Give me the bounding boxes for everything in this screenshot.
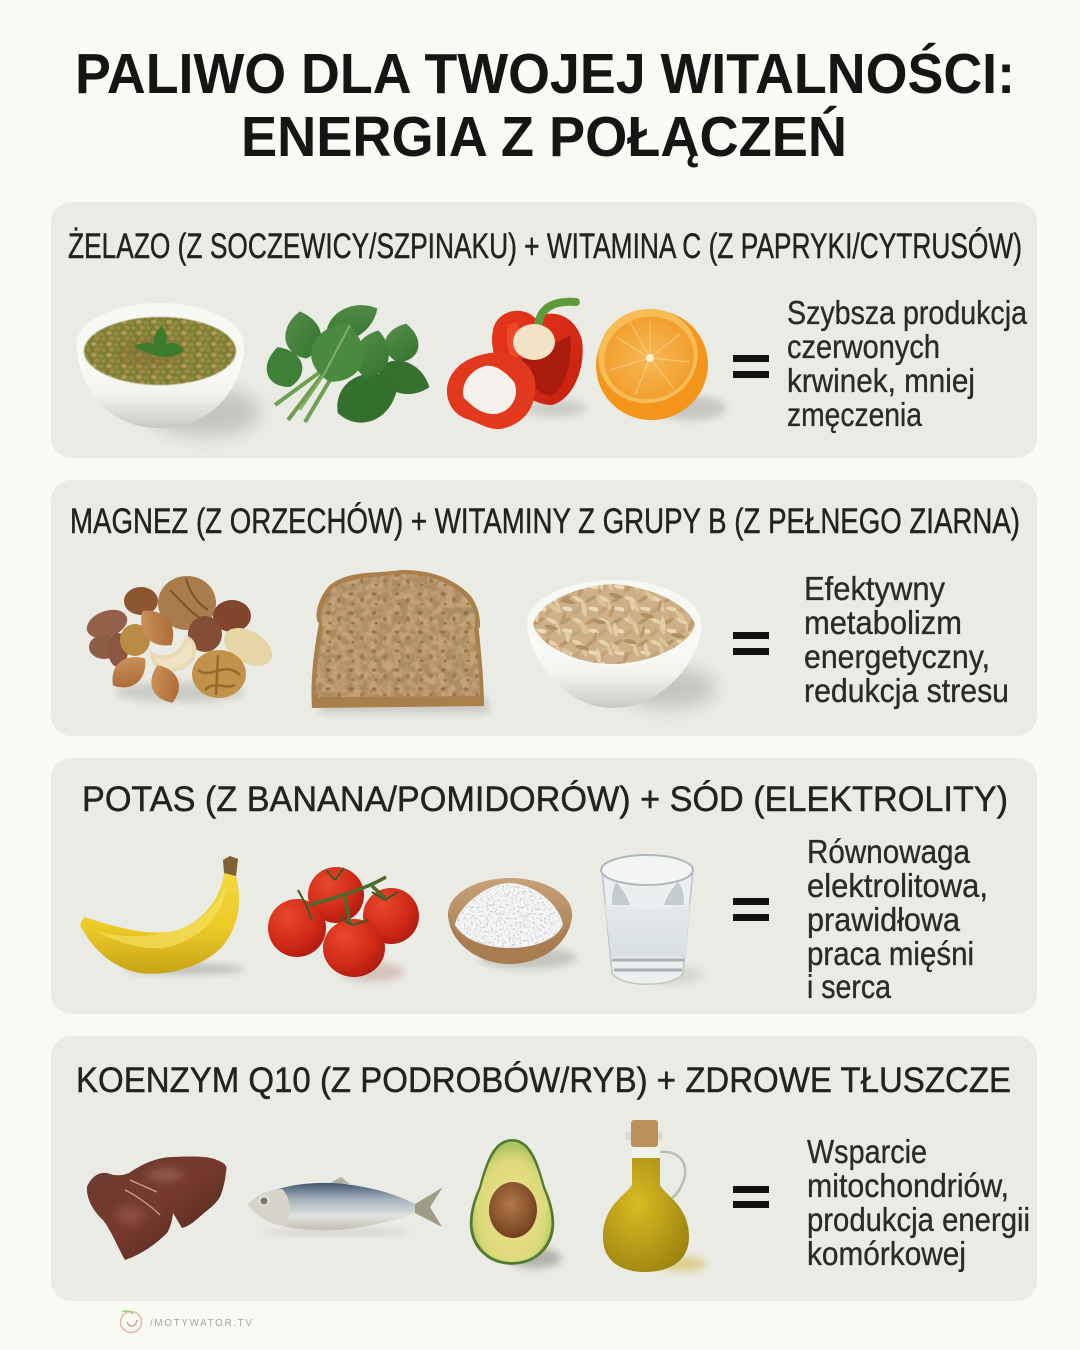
- watermark: [120, 1311, 252, 1332]
- equals sign: [733, 1186, 769, 1208]
- icon: tomatoes on the vine: [268, 867, 419, 982]
- result text: magnesium: [804, 570, 1009, 709]
- result text: coenzyme Q10: komórkowej: [807, 1235, 966, 1272]
- result text: potassium: [807, 833, 988, 1005]
- result text: coenzyme Q10: produkcja energii: [807, 1201, 1030, 1238]
- title: PALIWO DLA TWOJEJ WITALNOŚCI:: [75, 42, 1015, 106]
- icon: whole grain bread: [311, 570, 488, 713]
- icon: brown rice bowl: [527, 580, 716, 708]
- icon: olive oil bottle: [603, 1120, 706, 1272]
- icon: banana: [80, 856, 245, 974]
- result text: potassium: prawidłowa: [807, 901, 961, 938]
- title: [75, 42, 1015, 169]
- panel: coenzyme Q10 and healthy fats: [51, 1036, 1037, 1301]
- panel: magnesium and B vitamins: [51, 480, 1037, 736]
- result text: magnesium: Efektywny: [804, 570, 945, 607]
- icon: liver: [87, 1156, 227, 1260]
- equals sign: [733, 632, 769, 655]
- equals sign: [733, 355, 769, 378]
- icon: salt in wooden bowl: [448, 878, 576, 969]
- result text: potassium: Równowaga: [807, 833, 971, 870]
- result text: potassium: i serca: [807, 968, 892, 1005]
- panel: potassium and sodium: [51, 758, 1037, 1014]
- icon: fish: [248, 1177, 442, 1235]
- result text: iron: zmęczenia: [787, 396, 923, 433]
- result text: potassium: elektrolitowa,: [807, 867, 988, 904]
- result text: iron: [787, 294, 1028, 433]
- result text: iron: Szybsza produkcja: [787, 294, 1028, 331]
- result text: coenzyme Q10: mitochondriów,: [807, 1167, 1009, 1204]
- panel: iron and vitamin C: [51, 202, 1037, 458]
- icon: red bell pepper: [447, 302, 587, 429]
- result text: coenzyme Q10: [807, 1133, 1030, 1272]
- result text: magnesium: metabolizm: [804, 604, 962, 641]
- heading: potassium: POTAS (Z BANANA/POMIDORÓW) + SÓD (ELEKTROLITY): [82, 780, 1008, 819]
- icon: spinach: [261, 295, 435, 433]
- result text: magnesium: redukcja stresu: [804, 672, 1009, 709]
- result text: iron: czerwonych: [787, 328, 940, 365]
- result text: coenzyme Q10: Wsparcie: [807, 1133, 927, 1170]
- result text: iron: krwinek, mniej: [787, 362, 975, 399]
- watermark: /MOTYWATOR.TV: [150, 1318, 252, 1329]
- title: ENERGIA Z POŁĄCZEŃ: [241, 105, 847, 169]
- icon: avocado half: [470, 1139, 561, 1268]
- icon: lentil soup bowl: [76, 303, 260, 436]
- result text: potassium: praca mięśni: [807, 935, 974, 972]
- heading: coenzyme Q10: KOENZYM Q10 (Z PODROBÓW/RYB) + ZDROWE TŁUSZCZE: [76, 1061, 1011, 1100]
- icon: mixed nuts: [83, 576, 279, 708]
- icon: glass of water: [601, 855, 704, 984]
- icon: orange half: [584, 297, 726, 433]
- icon: watermark logo: [120, 1311, 142, 1332]
- result text: magnesium: energetyczny,: [804, 638, 990, 675]
- equals sign: [733, 898, 769, 921]
